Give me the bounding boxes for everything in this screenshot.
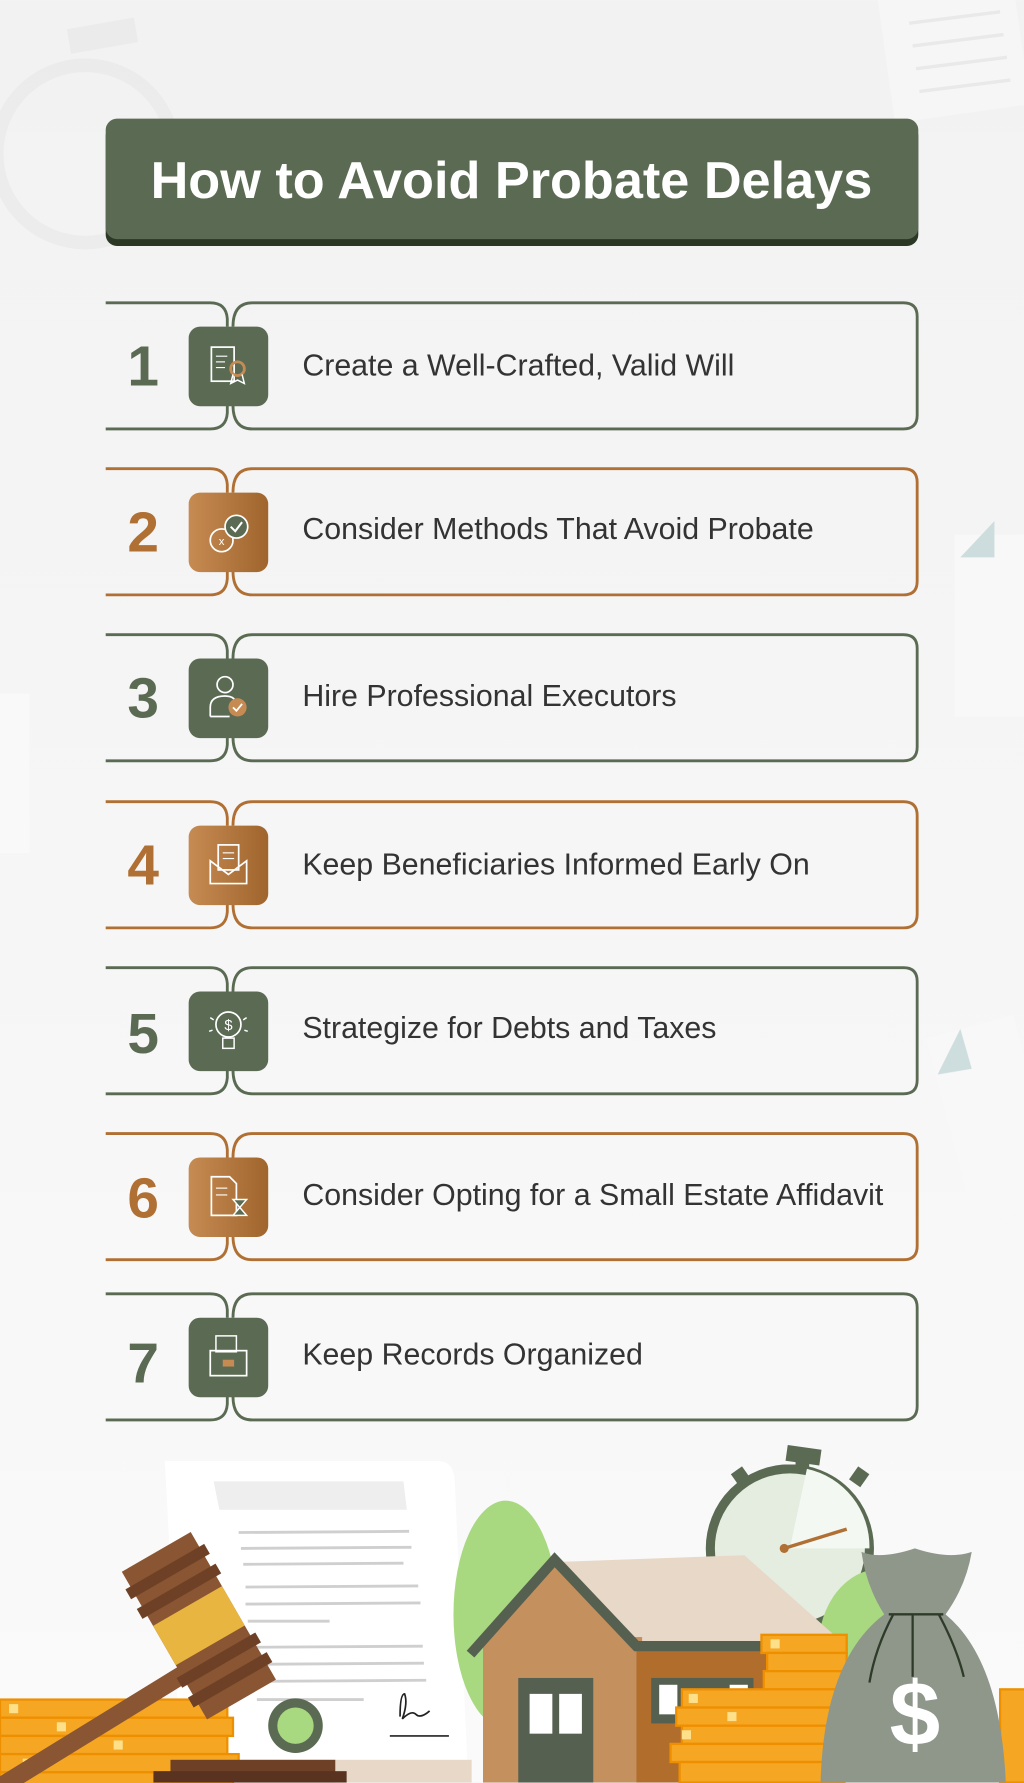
decoration: side papers [0,521,1024,1225]
house [471,1555,847,1783]
step 1: Create a Well-Crafted, Valid Will [302,350,734,383]
icon: certificate [189,327,268,406]
bush [453,1501,558,1728]
stopwatch [710,1445,869,1628]
icon: options check [189,493,268,572]
step 2: 2 [127,502,159,565]
money bag [821,1548,1006,1783]
step 5: 5 [127,1003,159,1066]
step 3: 3 [127,668,159,731]
seal [268,1698,323,1753]
coins right [671,1635,1024,1783]
step 3: Hire Professional Executors [302,680,677,713]
step 5 [106,968,917,1094]
money bag: $ [890,1664,940,1765]
step 6 [106,1134,917,1260]
step 4 [106,802,917,928]
icon: money bulb: $ [224,1018,233,1034]
step 7: 7 [127,1332,159,1395]
step 4: Keep Beneficiaries Informed Early On [302,848,810,881]
step 7 [106,1294,917,1420]
step 2: Consider Methods That Avoid Probate [302,513,814,546]
step 5: Strategize for Debts and Taxes [302,1012,716,1045]
step 3 [106,635,917,761]
coins left [0,1700,239,1783]
document paper [165,1461,472,1783]
gavel [0,1529,347,1783]
title [106,119,918,246]
icon: person check [189,659,268,738]
step 4: 4 [127,835,159,898]
icon: envelope letter [189,826,268,905]
illustration: bottom scene [0,1445,1024,1783]
icon: money bulb [189,992,268,1071]
step 6: Consider Opting for a Small Estate Affidavit [302,1179,884,1212]
title: How to Avoid Probate Delays [151,152,872,210]
step 6: 6 [127,1168,159,1231]
icon: file drawer [189,1318,268,1397]
step 7: Keep Records Organized [302,1338,643,1371]
bush right [818,1569,943,1728]
decoration: faint stopwatch top-left [0,17,174,243]
step 1: 1 [127,336,159,399]
decoration: paper top-right [878,0,1024,123]
step 2 [106,469,917,595]
step 1 [106,303,917,429]
icon: document hourglass [189,1157,268,1237]
icon: options check: x [219,536,225,548]
